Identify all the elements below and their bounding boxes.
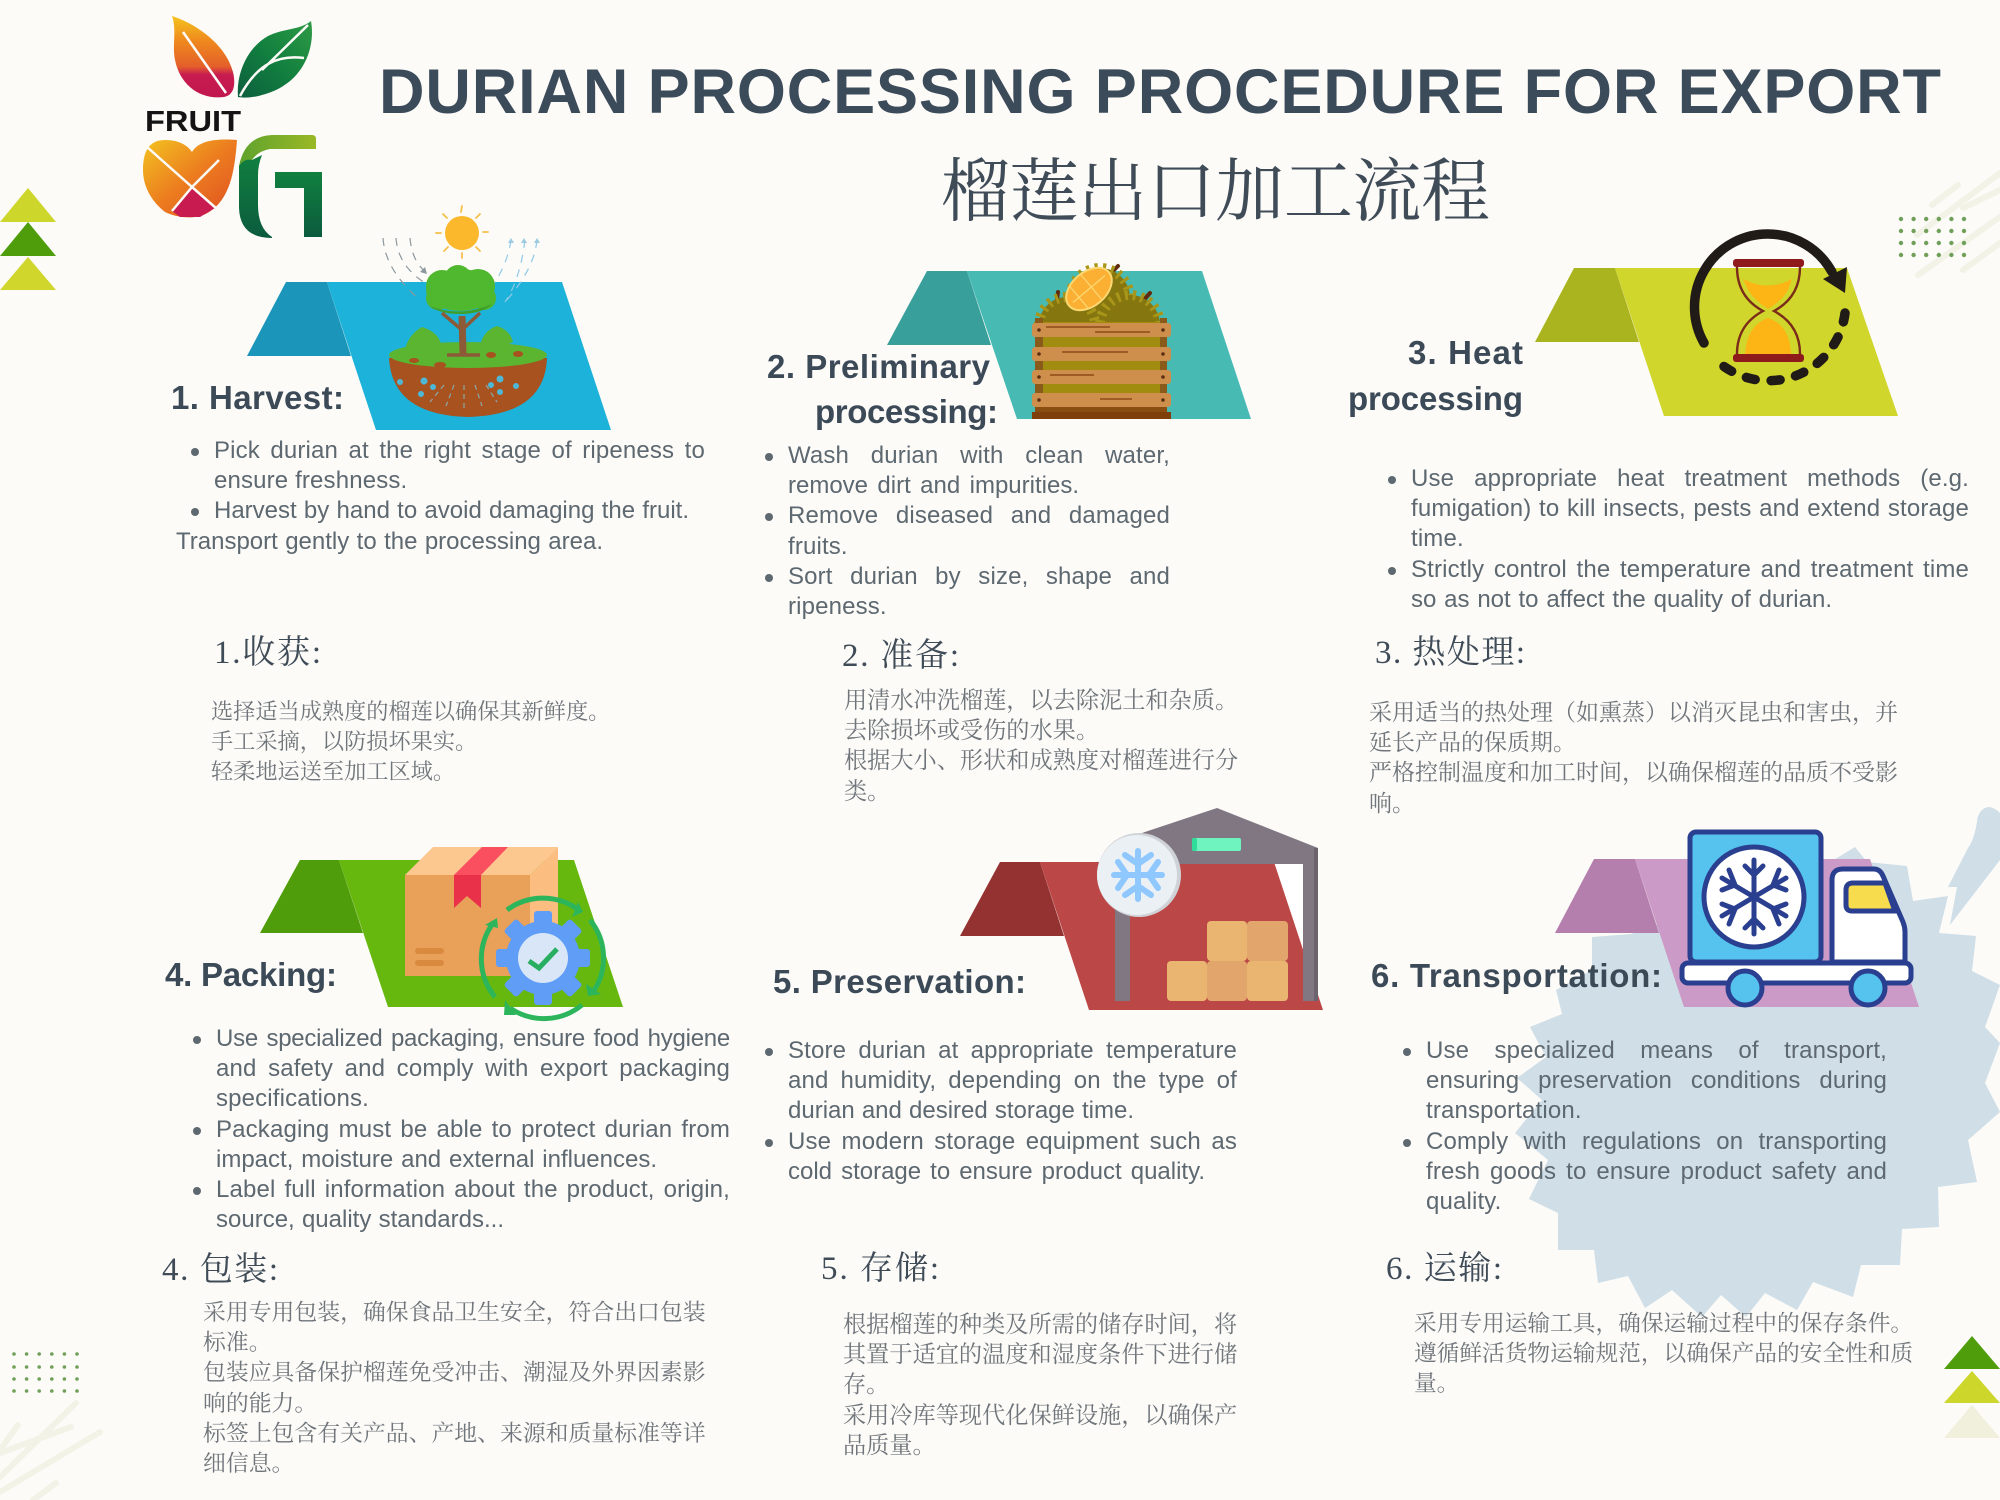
text block: preliminary processing bullets: Sort durian by size, shape and [788, 563, 1170, 590]
chinese text block: packing: 采用专用包装，确保食品卫生安全，符合出口包装 [203, 1300, 706, 1325]
lightning shard [1948, 807, 2000, 925]
text block: preservation bullets: Use modern storage equipment such as [788, 1128, 1237, 1155]
chinese text block: heat treatment: 采用适当的热处理（如熏蒸）以消灭昆虫和害虫，并 [1369, 700, 1898, 725]
heading: 3. Heat processing: processing [1348, 380, 1523, 417]
text block: packing bullets: Use specialized packaging, ensure food hygiene [216, 1025, 730, 1052]
heading: 3. Heat processing [1348, 334, 1523, 417]
text block: heat processing bullets: fumigation) to kill insects, pests and extend storage [1411, 495, 1969, 522]
text block: harvest bullets: ensure freshness. [214, 467, 407, 494]
dotted pattern top right [1899, 217, 1966, 257]
chinese text block: packing: 标签上包含有关产品、产地、来源和质量标准等详 [203, 1421, 706, 1446]
text block: packing bullets: Label full information about the product, origin, [216, 1176, 730, 1203]
chinese text block: storage: 其置于适宜的温度和湿度条件下进行储 [843, 1342, 1237, 1368]
heading: 2. Preliminary processing: processing: [815, 393, 998, 430]
chinese text block: preparation: 去除损坏或受伤的水果。 [844, 718, 1099, 744]
chinese text block: storage: 存。 [843, 1372, 889, 1398]
triangles right [1944, 1336, 2000, 1438]
banner: preliminary processing [887, 271, 1251, 419]
heading: 2. Preliminary processing: 2. Preliminary [767, 348, 991, 385]
chinese text block: preparation: 根据大小、形状和成熟度对榴莲进行分 [844, 748, 1238, 774]
chinese text block: storage [843, 1312, 1237, 1459]
banner: preservation [960, 862, 1323, 1010]
text block: heat processing bullets: Strictly control the temperature and treatment time [1411, 556, 1969, 583]
banner: packing [260, 860, 623, 1007]
text block: packing bullets: specifications. [216, 1085, 369, 1112]
chinese text block: packing: 包装应具备保护榴莲免受冲击、潮湿及外界因素影 [203, 1360, 706, 1385]
text block: harvest bullets: Pick durian at the right stage of ripeness to [214, 437, 705, 464]
chinese text block: heat treatment: 延长产品的保质期。 [1369, 730, 1576, 755]
text block: preservation bullets: and humidity, depending on the type of [788, 1067, 1237, 1094]
text block: transportation bullets: Use specialized means of transport, [1426, 1037, 1887, 1064]
text block: heat processing bullets: so as not to affect the quality of durian. [1411, 586, 1832, 613]
chinese text block: storage: 品质量。 [843, 1433, 936, 1459]
text block: packing bullets: and safety and comply with export packaging [216, 1055, 730, 1082]
text block: harvest bullets: Harvest by hand to avoid damaging the fruit. [214, 497, 689, 524]
chinese text block: storage: 采用冷库等现代化保鲜设施，以确保产 [843, 1403, 1237, 1429]
chinese text block: transport [1414, 1311, 1913, 1396]
chinese text block: transport: 采用专用运输工具，确保运输过程中的保存条件。 [1414, 1311, 1913, 1336]
text block: preservation bullets: cold storage to ensure product quality. [788, 1158, 1205, 1185]
step 6 banner and icon [1555, 832, 1919, 1007]
chinese text block: packing: 细信息。 [203, 1451, 294, 1476]
text block: preliminary processing bullets: ripeness. [788, 593, 887, 620]
chinese heading 3: 3. 热处理: [1375, 634, 1525, 671]
step 4 banner and icon [260, 847, 623, 1019]
step 5 banner and icon [960, 808, 1323, 1010]
chinese heading 2: 2. 准备: [842, 637, 959, 674]
text block: transportation bullets [1403, 1037, 1887, 1215]
chinese text block: heat treatment: 严格控制温度和加工时间，以确保榴莲的品质不受影 [1369, 760, 1898, 785]
heading: 4. Packing: 4. Packing: [165, 956, 337, 993]
banner: transportation [1555, 859, 1919, 1007]
step 2 banner and icon [887, 259, 1251, 419]
chinese text block: packing [203, 1300, 706, 1476]
text block: packing bullets: source, quality standards... [216, 1206, 504, 1233]
chinese text block: preparation: 类。 [844, 779, 890, 805]
text block: harvest bullets: Transport gently to the processing area. [176, 528, 603, 555]
text block: heat processing bullets: Use appropriate heat treatment methods (e.g. [1411, 465, 1969, 492]
chinese text block: preparation: 用清水冲洗榴莲，以去除泥土和杂质。 [844, 688, 1238, 714]
chinese text block: storage: 根据榴莲的种类及所需的储存时间，将 [843, 1312, 1237, 1338]
logo letter G [239, 135, 322, 238]
background streaks bottom left [0, 1403, 100, 1500]
icon: tree on soil island with sun [383, 206, 547, 417]
text block: packing bullets: impact, moisture and external influences. [216, 1146, 657, 1173]
logo lower leaves [143, 140, 237, 217]
chinese heading 4: 4. 包装: [162, 1251, 278, 1288]
text block: transportation bullets: transportation. [1426, 1097, 1582, 1124]
text block: preservation bullets [765, 1037, 1237, 1185]
text block: harvest bullets [176, 437, 705, 555]
banner: harvest [247, 282, 611, 430]
triangles left [0, 188, 56, 290]
step 3 banner and icon [1535, 234, 1898, 416]
logo wordmark: FRUIT [145, 106, 241, 138]
chinese text block: harvest: 轻柔地运送至加工区域。 [211, 759, 455, 784]
logo: Fruit G [143, 16, 322, 238]
heading: 2. Preliminary processing [767, 348, 998, 430]
title english: DURIAN PROCESSING PROCEDURE FOR EXPORT [379, 57, 1941, 127]
text block: preliminary processing bullets: remove dirt and impurities. [788, 472, 1079, 499]
starburst background shape [1515, 847, 2000, 1317]
chinese text block: transport: 遵循鲜活货物运输规范，以确保产品的安全性和质 [1414, 1341, 1913, 1366]
chinese text block: harvest: 选择适当成熟度的榴莲以确保其新鲜度。 [211, 699, 610, 724]
chinese text block: packing: 响的能力。 [203, 1391, 317, 1416]
text block: transportation bullets: quality. [1426, 1188, 1501, 1215]
chinese text block: harvest [211, 699, 610, 784]
title chinese: 榴莲出口加工流程 [941, 154, 1490, 230]
chinese heading 6: 6. 运输: [1386, 1250, 1502, 1287]
dotted pattern bottom left [12, 1352, 79, 1393]
text block: preliminary processing bullets: Wash durian with clean water, [788, 442, 1170, 469]
chinese text block: packing: 标准。 [203, 1330, 272, 1355]
icon: refrigerated truck [1682, 832, 1911, 1005]
text block: preservation bullets: durian and desired storage time. [788, 1097, 1134, 1124]
chinese text block: harvest: 手工采摘，以防损坏果实。 [211, 729, 477, 754]
logo leaf: orange [172, 16, 234, 97]
heading: 5. Preservation: 5. Preservation: [773, 963, 1026, 1000]
icon: hourglass with timer arrow [1695, 234, 1847, 381]
icon: durian crate [1032, 259, 1171, 419]
chinese text block: preparation [844, 688, 1238, 805]
text block: preliminary processing bullets: fruits. [788, 533, 848, 560]
text block: transportation bullets: ensuring preservation conditions during [1426, 1067, 1887, 1094]
banner: heat processing [1535, 268, 1898, 416]
icon: package box with gear [405, 847, 604, 1019]
chinese text block: transport: 量。 [1414, 1371, 1459, 1396]
heading: 1. Harvest: 1. Harvest: [171, 379, 344, 416]
text block: preliminary processing bullets: Remove diseased and damaged [788, 502, 1170, 529]
text block: heat processing bullets [1388, 465, 1969, 613]
text block: preservation bullets: Store durian at appropriate temperature [788, 1037, 1237, 1064]
step 1 banner and icon [247, 206, 611, 430]
text block: transportation bullets: fresh goods to ensure product safety and [1426, 1158, 1887, 1185]
chinese text block: heat treatment: 响。 [1369, 791, 1415, 816]
text block: packing bullets [193, 1025, 730, 1233]
text block: preliminary processing bullets [765, 442, 1170, 620]
text block: transportation bullets: Comply with regulations on transporting [1426, 1128, 1887, 1155]
heading: 3. Heat processing: 3. Heat [1408, 334, 1523, 371]
chinese heading 5: 5. 存储: [821, 1250, 939, 1287]
chinese heading 1: 1.收获: [214, 634, 321, 671]
chinese text block: heat treatment [1369, 700, 1898, 816]
background streaks top right [1917, 173, 2000, 275]
icon: cold storage warehouse [1097, 808, 1318, 1001]
text block: packing bullets: Packaging must be able to protect durian from [216, 1116, 730, 1143]
logo leaf: green [238, 21, 312, 98]
text block: heat processing bullets: time. [1411, 525, 1464, 552]
heading: 6. Transportation: 6. Transportation: [1371, 957, 1662, 994]
